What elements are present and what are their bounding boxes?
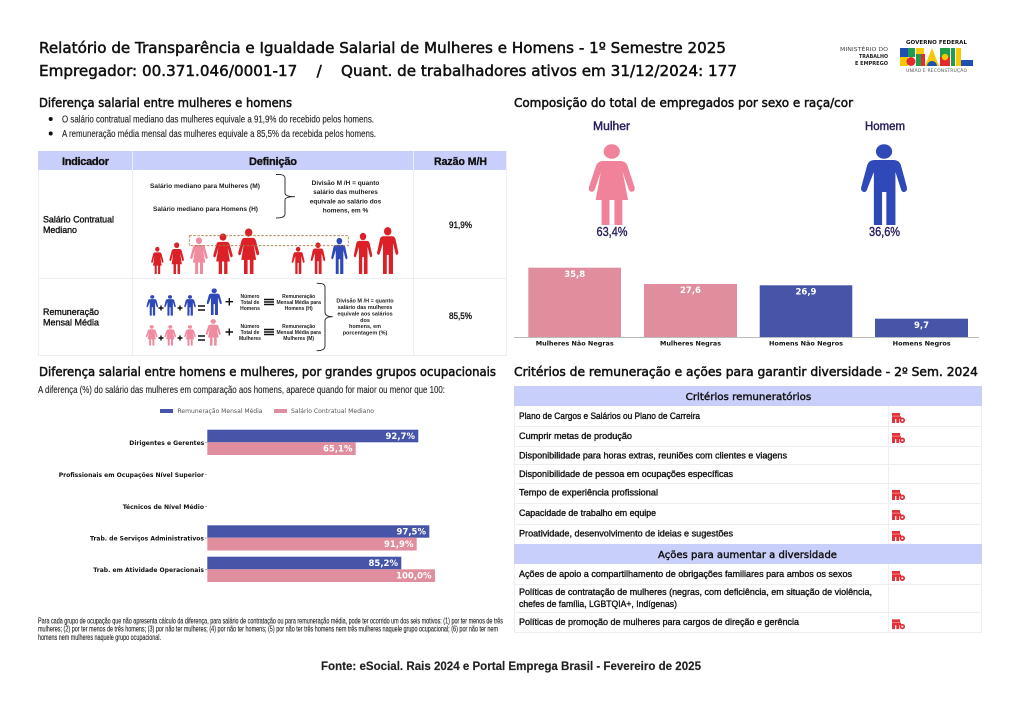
bullet text <box>49 114 376 140</box>
panel: critérios remuneratórios e ações: Políticas de promoção de mulheres para cargos de direção e gerência <box>519 617 799 627</box>
bar chart: grupos ocupacionais: Dirigentes e Gerentes <box>129 440 205 447</box>
heading: grupos ocupacionais: Diferença salarial entre homens e mulheres, por grandes grupos ocupacionais <box>39 365 496 379</box>
panel: tabela indicador: Remuneração <box>43 307 99 318</box>
definição remuneração média: Mulheres <box>239 336 261 342</box>
definição remuneração média: dos <box>360 318 370 324</box>
footnote: Para cada grupo de ocupação que não apresenta cálculo da diferença, para salário de contratação ou para remuneração média, pode ter ocorrido um dos seis motivos: (1) por ter menos de três <box>38 616 503 626</box>
definição remuneração média: salário das mulheres <box>338 305 392 311</box>
definição salário mediano: Divisão M /H = quanto <box>312 180 379 187</box>
bar chart: grupos ocupacionais: 65,1% <box>323 445 353 455</box>
bar chart: grupos ocupacionais: 97,5% <box>396 528 426 538</box>
subtitle: grupos ocupacionais: A diferença (%) do salário das mulheres em comparação aos homens, aparece quando for maior ou menor que 100: <box>38 384 445 396</box>
source footer: Fonte: eSocial. Rais 2024 e Portal Emprega Brasil - Fevereiro de 2025 <box>321 659 701 673</box>
bar chart: grupos ocupacionais: Trab. de Serviços Administrativos <box>90 536 204 542</box>
title: Relatório de Transparência e Igualdade Salarial de Mulheres e Homens - 1º Semestre 2025 <box>39 39 726 57</box>
pictograma mediana <box>151 227 398 274</box>
icon: homem 36,6%: 36,6% <box>869 225 900 239</box>
panel: critérios remuneratórios e ações: Ações para aumentar a diversidade <box>658 550 837 561</box>
bar chart: composição: 26,9 <box>796 288 817 298</box>
bar chart: composição: 9,7 <box>914 321 929 331</box>
definição remuneração média: equivale aos salários <box>337 312 393 318</box>
definição remuneração média: Remuneração <box>282 324 315 330</box>
footnote: mulheres; (2) por ter menos de três homens; (3) por não ter mulheres; (4) por não ter homens; (5) por não ter três homens nem três mulheres naquele grupo ocupacional; (6) por não ter nem <box>38 624 498 634</box>
panel: critérios remuneratórios e ações: Plano de Cargos e Salários ou Plano de Carreira <box>519 411 700 421</box>
bar chart: composição: Homens Não Negros <box>769 340 843 348</box>
heading: composição: Composição do total de empregados por sexo e raça/cor <box>514 96 853 110</box>
definição salário mediano: salário das mulheres <box>313 189 378 196</box>
footnote: homens nem mulheres naquele grupo ocupacional. <box>38 633 161 642</box>
logo: governo federal brasil: UNIÃO E RECONSTRUÇÃO <box>906 67 967 74</box>
logo: ministério do trabalho e emprego <box>840 45 888 67</box>
definição remuneração média: Homens (H) <box>285 306 313 312</box>
title: Empregador: 00.371.046/0001-17 / Quant. de trabalhadores ativos em 31/12/2024: 177 <box>39 62 737 80</box>
panel: critérios remuneratórios e ações: Proatividade, desenvolvimento de ideias e sugestões <box>519 529 733 539</box>
bar chart: grupos ocupacionais <box>59 430 435 582</box>
panel: tabela indicador: 85,5% <box>449 311 472 322</box>
definição salário mediano <box>150 174 382 218</box>
panel: critérios remuneratórios e ações: Tempo de experiência profissional <box>519 488 658 498</box>
chart legend: Salário Contratual Mediano <box>291 407 374 415</box>
icon: mulher 63,4%: 63,4% <box>596 225 628 239</box>
panel: critérios remuneratórios e ações: Disponibilidade para horas extras, reuniões com clientes e viagens <box>519 451 787 461</box>
definição remuneração média: homens, em <box>349 324 381 330</box>
logo: ministério do trabalho e emprego: E EMPREGO <box>855 61 888 67</box>
panel: tabela indicador: Salário Contratual <box>43 214 114 226</box>
panel: critérios remuneratórios e ações: Cumprir metas de produção <box>519 431 632 441</box>
bar chart: grupos ocupacionais: Técnicos de Nível Médio <box>123 503 204 511</box>
panel: tabela indicador: Definição <box>249 156 297 168</box>
panel: tabela indicador: Mediano <box>43 225 77 236</box>
heading: critérios: Critérios de remuneração e ações para garantir diversidade - 2º Sem. 2024 <box>514 365 978 379</box>
panel: critérios remuneratórios e ações: Disponibilidade de pessoa em ocupações específicas <box>519 469 733 479</box>
icon: homem 36,6% <box>861 121 907 239</box>
logo: ministério do trabalho e emprego: TRABALHO <box>859 54 888 60</box>
heading: diferença salarial: Diferença salarial entre mulheres e homens <box>39 96 292 110</box>
panel: critérios remuneratórios e ações <box>514 386 982 633</box>
bar chart: composição: Mulheres Não Negras <box>536 340 614 348</box>
definição remuneração média: Número <box>241 294 259 300</box>
definição remuneração média: Mensal Média para <box>276 300 321 306</box>
bar chart: composição: 27,6 <box>680 286 701 296</box>
definição remuneração média: Total de <box>241 330 260 336</box>
title <box>39 39 737 80</box>
bullet text: O salário contratual mediano das mulheres equivale a 91,9% do recebido pelos homens. <box>62 114 374 126</box>
definição remuneração média: Mulheres (M) <box>283 336 314 342</box>
definição remuneração média: Divisão M /H = quanto <box>336 298 394 304</box>
panel: critérios remuneratórios e ações: Capacidade de trabalho em equipe <box>519 508 656 518</box>
definição remuneração média: Total de <box>241 300 260 306</box>
chart legend <box>160 407 374 415</box>
panel: tabela indicador: 91,9% <box>449 220 472 231</box>
logo: governo federal brasil: GOVERNO FEDERAL <box>906 40 967 46</box>
logo: governo federal brasil <box>900 40 973 74</box>
definição salário mediano: Salário mediano para Mulheres (M) <box>150 183 260 190</box>
logo: ministério do trabalho e emprego: MINISTÉRIO DO <box>840 45 888 53</box>
definição salário mediano: homens, em % <box>323 208 368 214</box>
bar chart: grupos ocupacionais: 92,7% <box>386 432 415 442</box>
chart legend: Remuneração Mensal Média <box>178 407 263 415</box>
definição remuneração média: Homens <box>240 306 260 312</box>
bar chart: grupos ocupacionais: 91,9% <box>384 540 414 550</box>
bar chart: composição: 35,8 <box>564 270 585 280</box>
panel: tabela indicador: Mensal Média <box>43 318 100 328</box>
definição remuneração média: Mensal Média para <box>276 330 321 336</box>
bar chart: grupos ocupacionais: Profissionais em Ocupações Nível Superior <box>59 471 205 479</box>
bar chart: grupos ocupacionais: 85,2% <box>368 559 398 569</box>
definição salário mediano: Salário mediano para Homens (H) <box>153 206 258 213</box>
icon: mulher 63,4% <box>589 121 635 239</box>
bar chart: composição: Homens Negros <box>893 340 951 348</box>
panel: tabela indicador <box>38 151 507 356</box>
icon: mulher 63,4%: Mulher <box>593 121 630 133</box>
panel: critérios remuneratórios e ações: Políticas de contratação de mulheres (negras, com deficiência, em situação de violência, <box>519 587 872 597</box>
bar chart: grupos ocupacionais: Trab. em Atividade Operacionais <box>93 567 204 574</box>
bar chart: composição <box>514 268 979 348</box>
panel: critérios remuneratórios e ações: chefes de família, LGBTQIA+, Indígenas) <box>519 599 677 609</box>
definição remuneração média: porcentagem (%) <box>343 330 387 336</box>
panel: tabela indicador: Razão M/H <box>434 156 487 168</box>
panel: critérios remuneratórios e ações: Critérios remuneratórios <box>686 391 811 403</box>
bar chart: grupos ocupacionais: 100,0% <box>396 572 432 582</box>
definição remuneração média <box>146 283 394 351</box>
footnote <box>38 616 503 642</box>
definição remuneração média: Remuneração <box>282 294 315 300</box>
panel: tabela indicador: Indicador <box>62 156 110 168</box>
bar chart: composição: Mulheres Negras <box>660 340 721 348</box>
definição remuneração média: Número <box>241 324 259 330</box>
icon: homem 36,6%: Homem <box>865 121 905 133</box>
panel: critérios remuneratórios e ações: Ações de apoio a compartilhamento de obrigações familiares para ambos os sexos <box>519 569 852 579</box>
bullet text: A remuneração média mensal das mulheres equivale a 85,5% da recebida pelos homens. <box>62 128 376 140</box>
definição salário mediano: equivale ao salário dos <box>310 198 382 206</box>
